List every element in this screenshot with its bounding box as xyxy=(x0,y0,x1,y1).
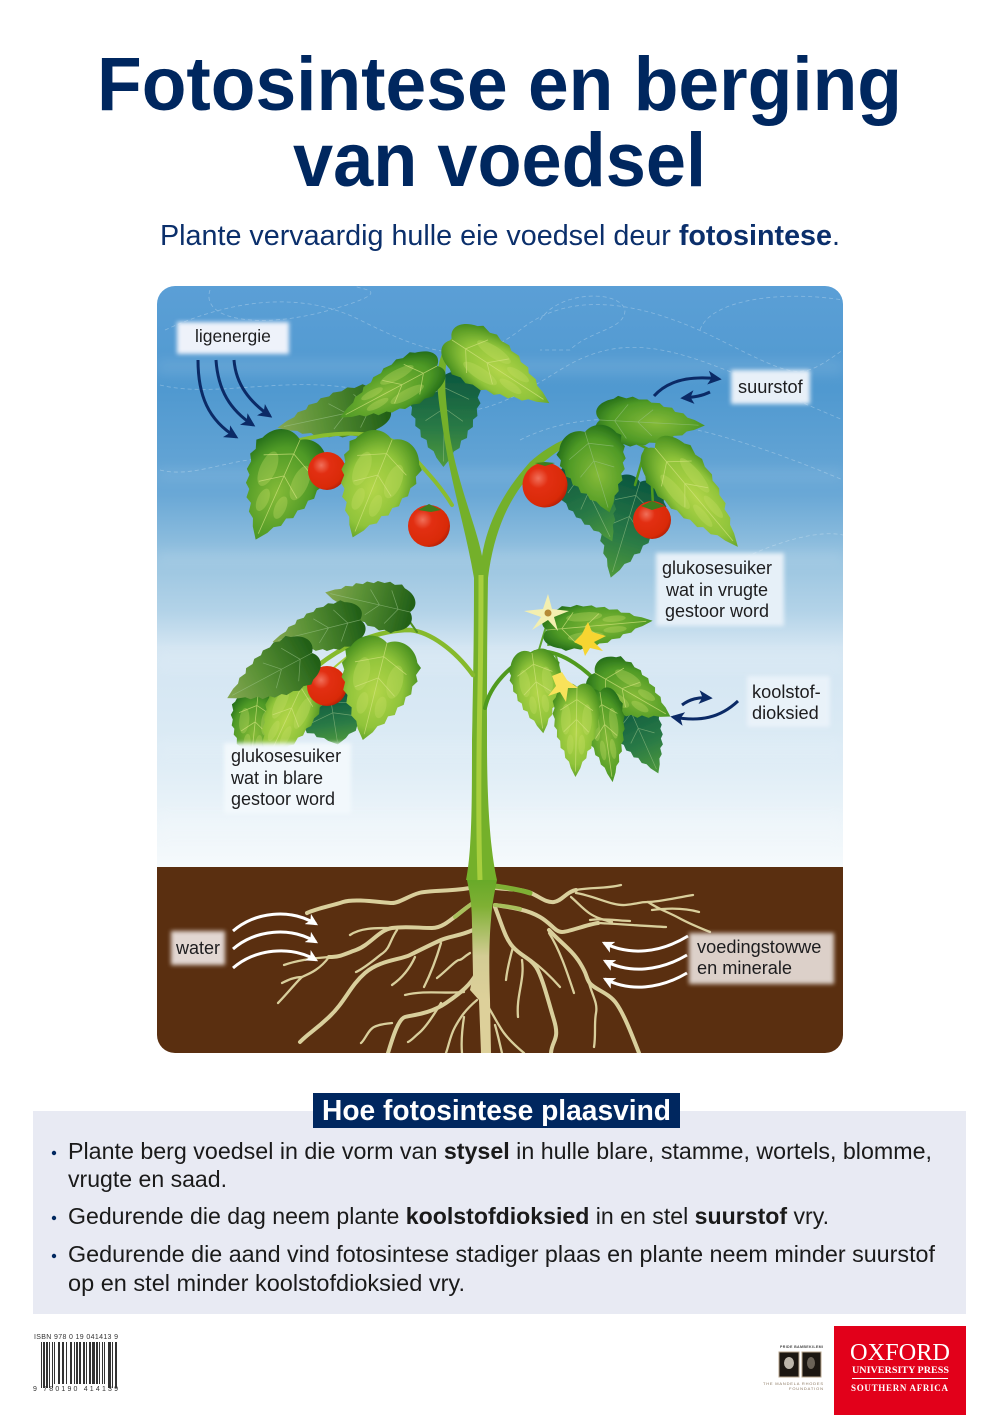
label: water: water xyxy=(175,938,220,958)
logo: Mandela Rhodes Foundation: PRIDE BAMBEKILEMI xyxy=(780,1345,823,1349)
barcode: ISBN 978 0 19 041413 9 xyxy=(34,1334,118,1341)
label: ligenergie: ligenergie xyxy=(195,326,271,346)
back leaves xyxy=(272,371,681,784)
arrows: water xyxy=(233,914,316,968)
tomatoes xyxy=(408,462,671,547)
label: glukosesuiker in blare: gestoor word xyxy=(231,789,335,809)
label: glukosesuiker in blare: wat in blare xyxy=(230,768,323,788)
label: glukosesuiker in vrugte xyxy=(656,553,784,626)
label: koolstofdioksied xyxy=(747,676,830,727)
soil xyxy=(157,867,843,1053)
leaves xyxy=(214,313,760,785)
subtitle: Plante vervaardig hulle eie voedsel deur fotosintese. xyxy=(160,220,840,252)
stem and branches xyxy=(300,338,653,880)
logo: Mandela Rhodes Foundation: FOUNDATION xyxy=(789,1386,823,1391)
label: koolstofdioksied: koolstof- xyxy=(752,682,821,702)
label: glukosesuiker in vrugte: wat in vrugte xyxy=(665,580,768,600)
barcode: 9 780190 414139 xyxy=(33,1386,118,1393)
label: glukosesuiker in vrugte: glukosesuiker xyxy=(662,558,772,578)
logo: Oxford University Press: SOUTHERN AFRICA xyxy=(851,1383,948,1393)
bullet 1: Plante berg voedsel in die vorm van stysel in hulle blare, stamme, wortels, blomme, xyxy=(68,1138,932,1164)
panel: plant diagram xyxy=(157,286,843,1053)
label: ligenergie xyxy=(177,322,289,354)
barcode xyxy=(33,1334,118,1393)
arrows: light energy xyxy=(198,360,270,437)
title: van voedsel xyxy=(293,118,706,203)
arrows: nutrients xyxy=(604,936,688,987)
bullet 3 xyxy=(52,1241,936,1296)
label: water xyxy=(171,931,225,965)
logo: Oxford University Press: UNIVERSITY PRESS xyxy=(852,1365,949,1375)
label: koolstofdioksied: dioksied xyxy=(752,703,819,723)
label: voedingstowwe en minerale xyxy=(689,933,834,984)
bullet 3: Gedurende die aand vind fotosintese stadiger plaas en plante neem minder suurstof xyxy=(68,1241,936,1267)
label: glukosesuiker in blare xyxy=(224,743,351,814)
sky background xyxy=(157,286,843,868)
taproot xyxy=(467,880,497,1053)
title: Fotosintese en berging xyxy=(97,42,902,127)
heading tab: Hoe fotosintese plaasvind xyxy=(322,1095,671,1127)
bullet 1 xyxy=(52,1138,932,1192)
label: suurstof: suurstof xyxy=(738,377,804,397)
arrows: carbon dioxide xyxy=(673,698,738,719)
label: glukosesuiker in vrugte: gestoor word xyxy=(665,601,769,621)
label: suurstof xyxy=(731,370,810,404)
bullet 1: vrugte en saad. xyxy=(68,1166,227,1192)
label: voedingstowwe en minerale: en minerale xyxy=(697,958,792,978)
panel: info box xyxy=(33,1093,966,1314)
logo: Oxford University Press: OXFORD xyxy=(850,1340,950,1366)
roots xyxy=(278,885,710,1053)
bullet 2: Gedurende die dag neem plante koolstofdioksied in en stel suurstof vry. xyxy=(68,1203,829,1229)
tomatoes behind leaves xyxy=(219,420,347,778)
title xyxy=(97,42,902,203)
logo: Mandela Rhodes Foundation: THE MANDELA RHODES xyxy=(763,1381,823,1386)
logo: Oxford University Press xyxy=(834,1326,966,1415)
arrows: oxygen xyxy=(654,378,719,398)
label: glukosesuiker in blare: glukosesuiker xyxy=(231,746,341,766)
flowers xyxy=(524,594,606,702)
label: voedingstowwe en minerale: voedingstowwe xyxy=(697,937,821,957)
logo: Mandela Rhodes Foundation xyxy=(763,1345,823,1391)
bullet 3: op en stel minder koolstofdioksied vry. xyxy=(68,1270,465,1296)
